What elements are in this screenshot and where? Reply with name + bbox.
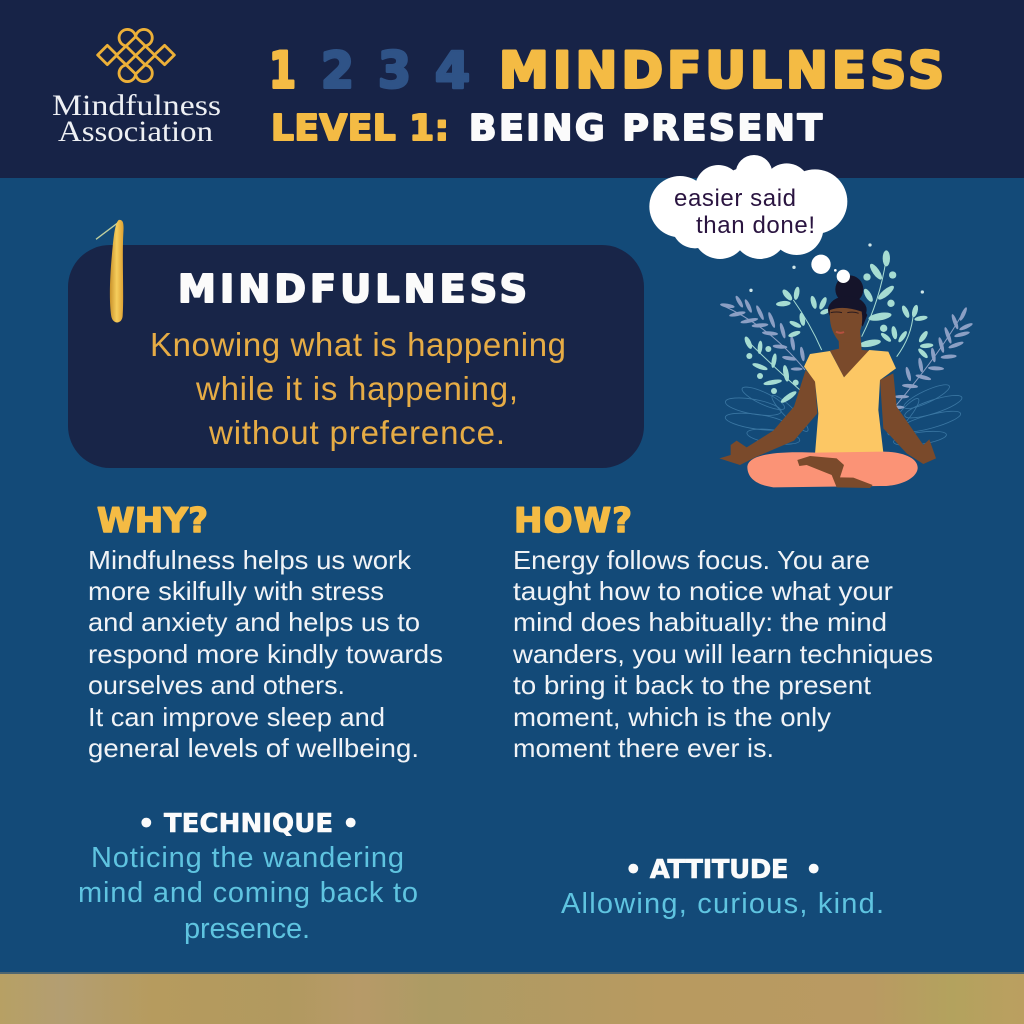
why body text: ourselves and others. (88, 670, 345, 700)
why body text: more skilfully with stress (88, 576, 384, 606)
thought trail dots (811, 255, 850, 283)
logo wordmark: Association (58, 115, 213, 148)
how section (512, 501, 933, 763)
technique text: presence. (184, 913, 310, 945)
how body text: mind does habitually: the mind (513, 607, 887, 637)
how body text: Energy follows focus. You are (513, 545, 870, 575)
why body text: general levels of wellbeing. (88, 733, 419, 763)
subtitle: level 1 being present: LEVEL 1: (271, 108, 449, 149)
faint outline leaves (724, 381, 964, 448)
yellow shirt (804, 350, 896, 454)
definition text: without preference. (208, 414, 505, 451)
title: level numbers and MINDFULNESS: 3 (378, 42, 411, 100)
arm left (719, 370, 817, 465)
why body text (88, 545, 443, 763)
title: level numbers and MINDFULNESS: MINDFULNESS (499, 42, 944, 100)
definition text: Knowing what is happening (150, 326, 566, 363)
definition text (150, 326, 566, 451)
logo: endless knot and name (52, 29, 221, 148)
hair (828, 275, 867, 327)
bubble text (674, 185, 815, 239)
panel background (68, 245, 644, 468)
panel: mindfulness definition (68, 220, 644, 468)
attitude heading: • ATTITUDE • (625, 855, 822, 885)
technique heading: • TECHNIQUE • (138, 809, 359, 839)
logo wordmark: Mindfulness (52, 89, 221, 122)
how heading: HOW? (514, 501, 632, 541)
face details (831, 312, 859, 333)
why body text: respond more kindly towards (88, 639, 443, 669)
how body text: wanders, you will learn techniques (512, 639, 933, 669)
teal branches (743, 250, 934, 405)
how body text: taught how to notice what your (513, 576, 893, 606)
technique text: mind and coming back to (78, 877, 418, 909)
technique section (78, 809, 418, 945)
technique text (78, 842, 418, 945)
how body text: moment, which is the only (513, 702, 831, 732)
subtitle: level 1 being present (271, 108, 822, 149)
attitude section (561, 855, 884, 920)
illustration: meditating woman with foliage (719, 243, 973, 488)
icon: endless knot (98, 29, 174, 82)
title: level numbers and MINDFULNESS (269, 42, 944, 100)
subtitle: level 1 being present: BEING PRESENT (469, 108, 822, 149)
bubble text: than done! (696, 212, 815, 239)
footer band (0, 972, 1024, 1024)
why body text: It can improve sleep and (88, 702, 385, 732)
why body text: Mindfulness helps us work (88, 545, 412, 575)
why section (88, 501, 443, 763)
thought bubble with text (649, 155, 847, 259)
floating dots (749, 243, 924, 294)
how body text (512, 545, 933, 763)
why heading: WHY? (97, 501, 208, 541)
grey left and right branches (720, 295, 973, 409)
how body text: to bring it back to the present (513, 670, 872, 700)
title: level numbers and MINDFULNESS: 4 (435, 42, 470, 100)
neck and head (830, 308, 870, 377)
how body text: moment there ever is. (513, 733, 774, 763)
why body text: and anxiety and helps us to (88, 607, 420, 637)
attitude text: Allowing, curious, kind. (561, 888, 884, 920)
bubble shapes (649, 155, 847, 259)
definition text: while it is happening, (195, 370, 518, 407)
coral trousers (747, 452, 918, 487)
header band (0, 0, 1024, 178)
arm right (880, 373, 936, 464)
title: level numbers and MINDFULNESS: 1 (269, 42, 296, 100)
title: level numbers and MINDFULNESS: 2 (321, 42, 354, 100)
feet (797, 456, 873, 488)
logo wordmark (52, 89, 221, 148)
panel heading: MINDFULNESS (178, 267, 527, 311)
icon: gold handwritten numeral 1 (96, 220, 124, 322)
technique text: Noticing the wandering (91, 842, 404, 874)
bubble text: easier said (674, 185, 796, 212)
